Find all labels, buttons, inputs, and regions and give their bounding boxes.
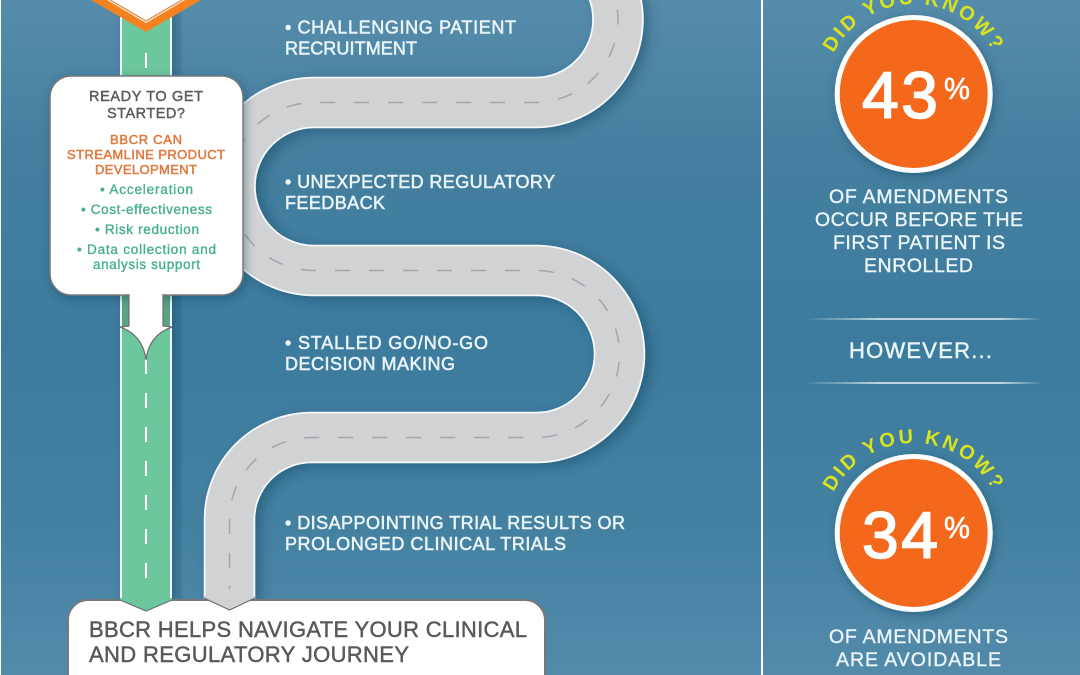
winding grey road	[230, 0, 620, 600]
callout: BBCR helps navigate: AND REGULATORY JOURNEY	[89, 642, 409, 667]
stat: 43 percent: %	[944, 71, 970, 106]
stat: 34 percent: %	[944, 510, 970, 545]
background: left panel	[1, 0, 761, 675]
callout: ready to get started: READY TO GET	[89, 89, 203, 105]
obstacle: go/no-go decisions	[285, 333, 488, 374]
stat: 43 percent: ENROLLED	[864, 255, 973, 277]
stat: 43 percent: OF AMENDMENTS	[829, 186, 1008, 208]
obstacle: regulatory feedback: • UNEXPECTED REGULATORY	[285, 172, 555, 192]
obstacle: trial results: • DISAPPOINTING TRIAL RESULTS OR	[285, 513, 625, 533]
callout: ready to get started: • Cost-effectiveness	[81, 202, 212, 217]
obstacle: regulatory feedback: FEEDBACK	[285, 193, 385, 213]
callout: ready to get started: STARTED?	[107, 106, 185, 122]
green road	[120, 0, 172, 602]
stat: 34 percent: 34	[862, 498, 938, 572]
callout: ready to get started: DEVELOPMENT	[95, 162, 197, 177]
obstacle: patient recruitment	[285, 18, 516, 58]
stat: 34 percent: DID YOU KNOW?	[822, 429, 1003, 491]
icon: orange chevron marker at top	[91, 0, 201, 32]
obstacle: go/no-go decisions: DECISION MAKING	[285, 354, 455, 374]
divider text: however: HOWEVER...	[849, 338, 992, 363]
callout: ready to get started: • Acceleration	[100, 182, 193, 197]
icon: grey road tip	[204, 596, 255, 610]
icon: green road tip	[120, 598, 172, 611]
stat: 43 percent: 43	[862, 58, 938, 132]
obstacle: regulatory feedback	[285, 172, 555, 213]
stat: 43 percent: FIRST PATIENT IS	[833, 232, 1005, 254]
stat: 34 percent	[822, 429, 1008, 671]
callout: BBCR helps navigate: BBCR HELPS NAVIGATE YOUR CLINICAL	[89, 617, 527, 642]
callout: ready to get started: BBCR CAN	[110, 132, 182, 147]
stat: 43 percent	[815, 0, 1023, 277]
obstacle: trial results: PROLONGED CLINICAL TRIALS	[285, 534, 566, 554]
icon: white arrow below callout	[120, 295, 172, 360]
obstacle: trial results	[285, 513, 625, 554]
callout: ready to get started: • Risk reduction	[95, 222, 199, 237]
stat: 43 percent: OCCUR BEFORE THE	[815, 209, 1023, 231]
obstacle: patient recruitment: RECRUITMENT	[285, 38, 417, 58]
callout: ready to get started: • Data collection and	[77, 242, 216, 257]
obstacle: patient recruitment: • CHALLENGING PATIENT	[285, 18, 516, 38]
stat: 34 percent: ARE AVOIDABLE	[836, 649, 1001, 671]
callout: BBCR helps navigate	[68, 600, 545, 675]
callout: ready to get started	[50, 76, 243, 360]
callout: ready to get started: STREAMLINE PRODUCT	[67, 147, 225, 162]
background: right panel	[763, 0, 1080, 675]
stat: 34 percent: OF AMENDMENTS	[829, 626, 1008, 648]
callout: ready to get started: analysis support	[93, 257, 200, 272]
obstacle: go/no-go decisions: • STALLED GO/NO-GO	[285, 333, 488, 353]
